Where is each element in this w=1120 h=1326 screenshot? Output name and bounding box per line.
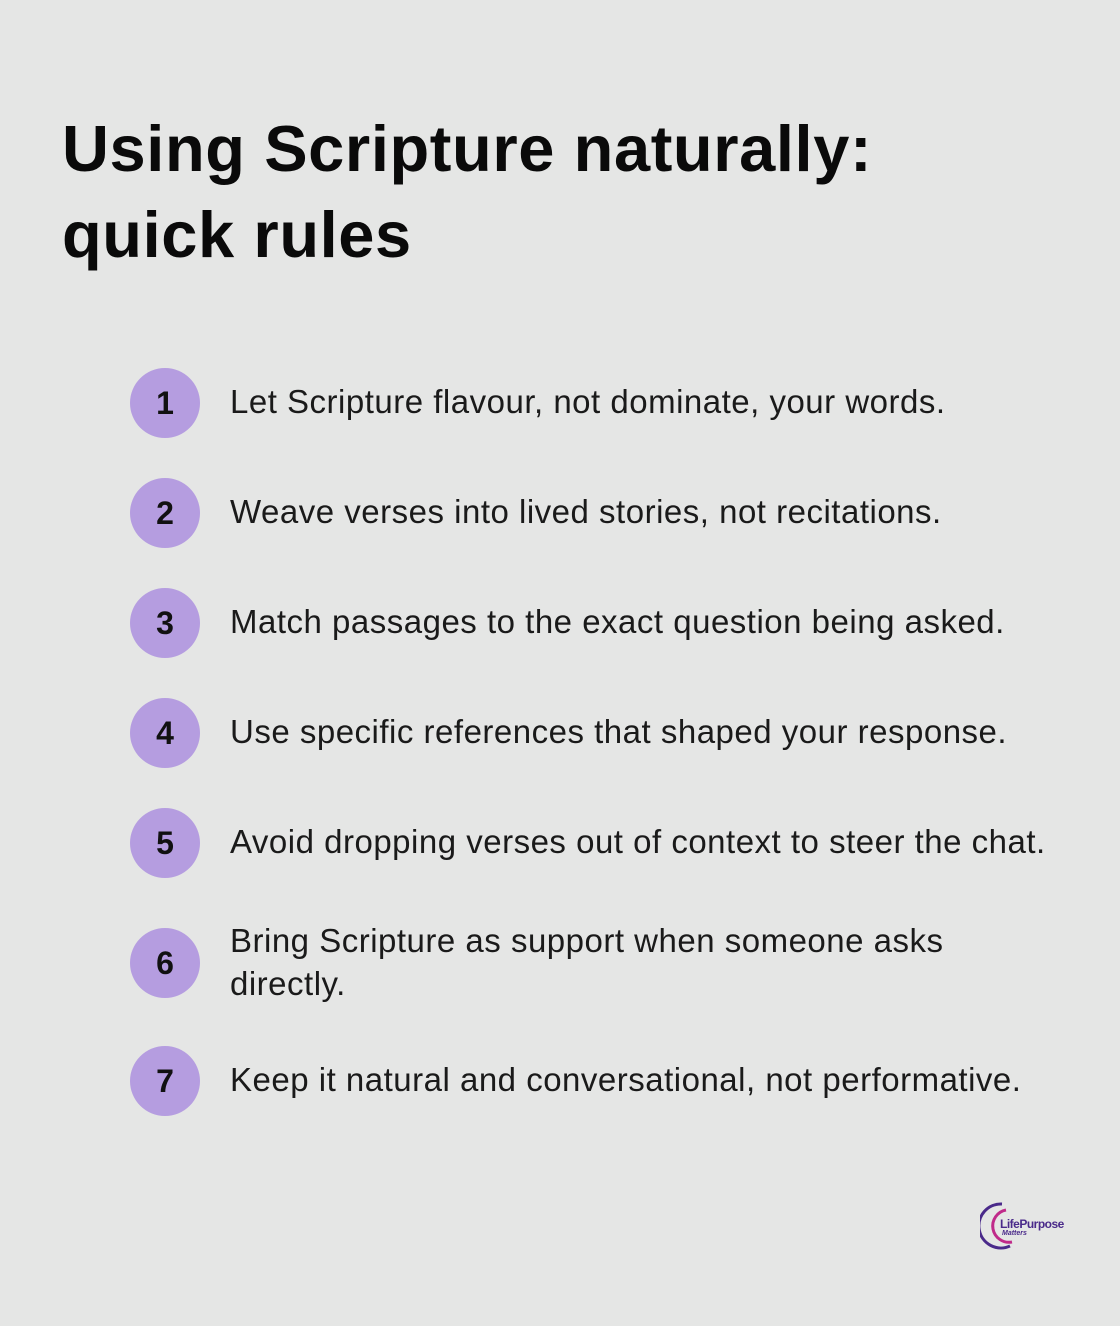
- logo: Matters: [1002, 1230, 1027, 1237]
- item 6: directly.: [230, 965, 346, 1002]
- item 3: [130, 588, 1005, 658]
- item 5: Avoid dropping verses out of context to steer the chat.: [230, 823, 1046, 860]
- logo: LifePurpose: [1000, 1217, 1064, 1231]
- item 4: Use specific references that shaped your response.: [230, 713, 1007, 750]
- item 3: Match passages to the exact question being asked.: [230, 603, 1005, 640]
- item 7: 7: [156, 1062, 174, 1098]
- item 1: 1: [156, 384, 174, 420]
- item 5: 5: [156, 824, 174, 860]
- item 3: 3: [156, 604, 174, 640]
- item 2: [130, 478, 942, 548]
- item 4: [130, 698, 1007, 768]
- title: [62, 112, 872, 271]
- title: quick rules: [62, 198, 412, 271]
- item 7: Keep it natural and conversational, not performative.: [230, 1061, 1021, 1098]
- item 1: [130, 368, 946, 438]
- item 7: [130, 1046, 1021, 1116]
- logo: [980, 1202, 1064, 1250]
- item 2: Weave verses into lived stories, not recitations.: [230, 493, 942, 530]
- title: Using Scripture naturally:: [62, 112, 872, 185]
- item 6: [130, 922, 944, 1002]
- item 2: 2: [156, 494, 174, 530]
- item 6: 6: [156, 944, 174, 980]
- item 4: 4: [156, 714, 174, 750]
- item 6: Bring Scripture as support when someone asks: [230, 922, 944, 959]
- item 1: Let Scripture flavour, not dominate, your words.: [230, 383, 946, 420]
- item 5: [130, 808, 1046, 878]
